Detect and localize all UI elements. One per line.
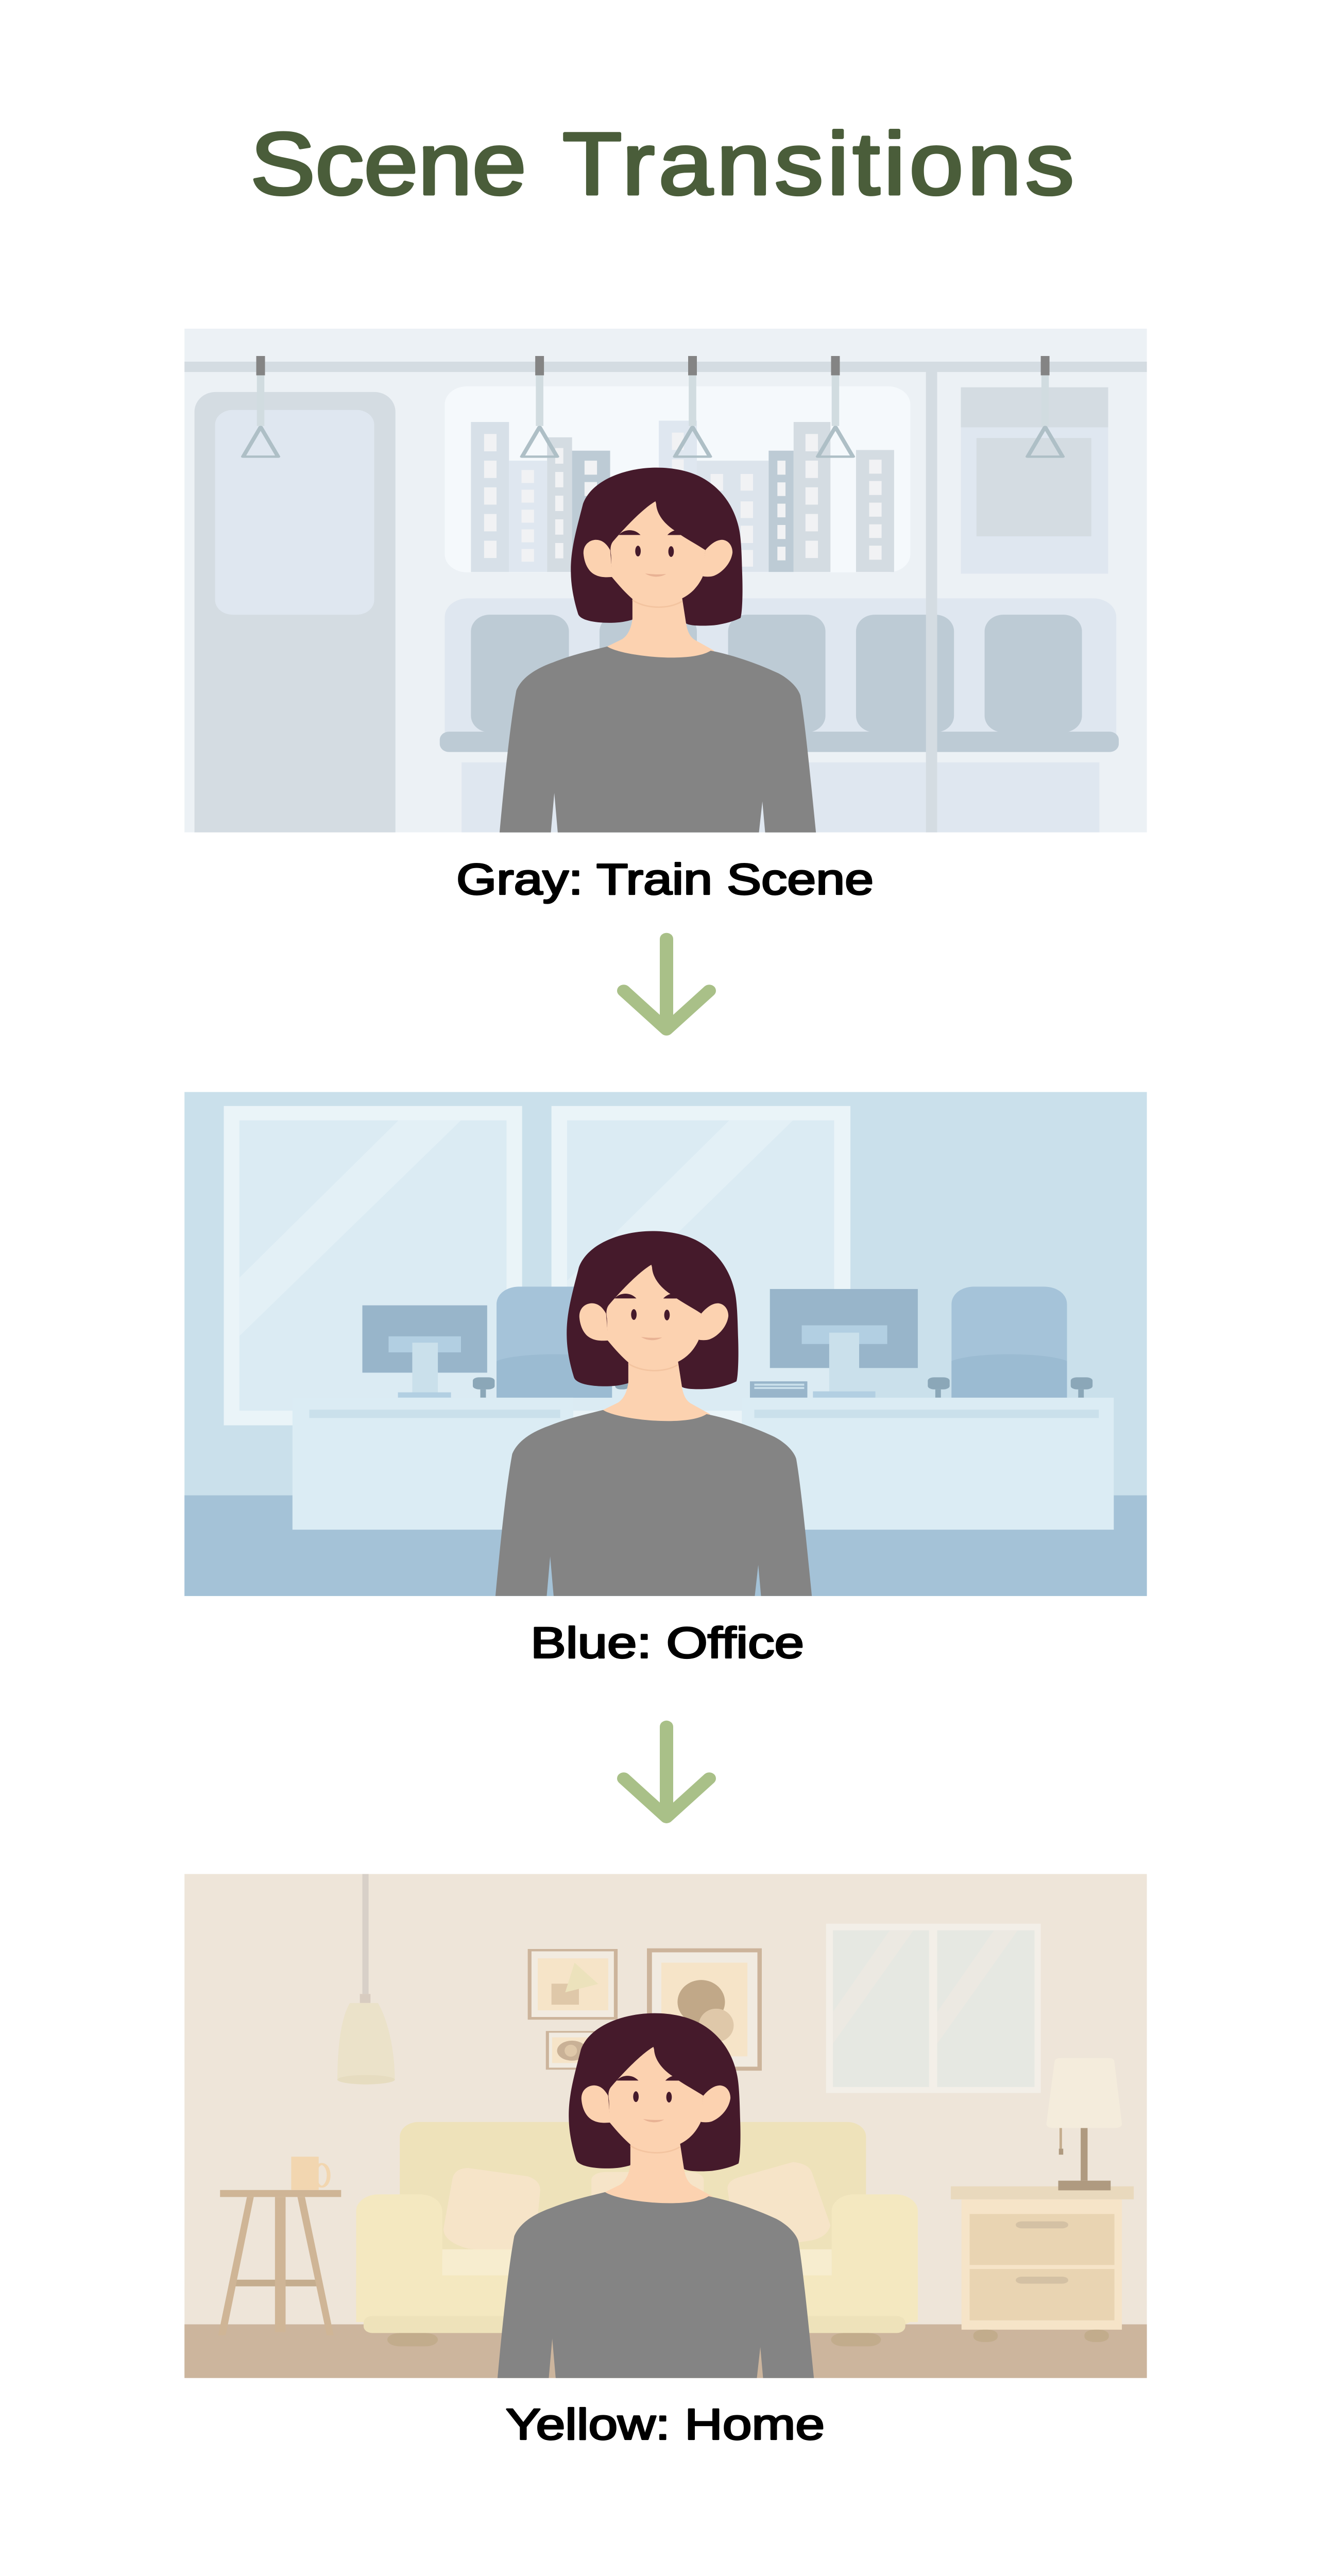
label: yellow home: Yellow: Home (506, 2400, 825, 2449)
label: gray train scene: Gray: Train Scene (456, 855, 874, 904)
panel: gray train scene (184, 329, 1147, 833)
office background (184, 1092, 1147, 1596)
train background (184, 329, 1147, 833)
label: blue office: Blue: Office (531, 1618, 804, 1667)
character: woman on train (500, 468, 816, 833)
title: Transitions (562, 115, 1078, 213)
character: woman at office (495, 1231, 812, 1596)
home background (184, 1874, 1147, 2378)
title: Scene (250, 115, 526, 213)
arrow: office to home (624, 1726, 709, 1817)
hanging straps (243, 356, 1063, 456)
panel: yellow home scene (184, 1874, 1147, 2378)
panel: blue office scene (184, 1092, 1147, 1596)
character: woman at home (498, 2013, 814, 2378)
arrow: train to office (624, 939, 709, 1029)
